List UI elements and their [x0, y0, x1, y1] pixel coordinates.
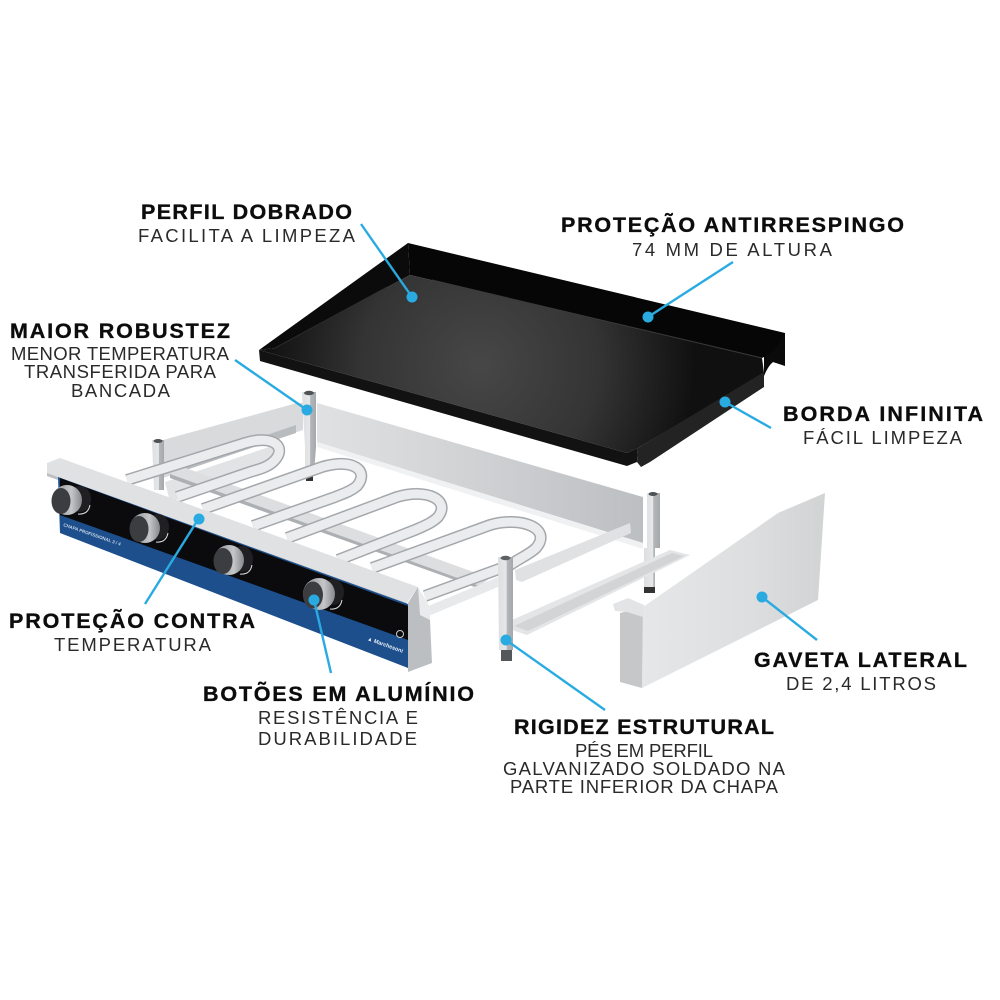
- line: robustez: [235, 360, 312, 416]
- label: rigidez estrutural: PARTE INFERIOR DA CHAPA: [510, 776, 779, 797]
- drawer end: [620, 607, 643, 688]
- label: rigidez estrutural: RIGIDEZ ESTRUTURAL: [514, 715, 774, 739]
- label: botões em alumínio: BOTÕES EM ALUMÍNIO: [203, 681, 474, 706]
- rear wall return: [764, 333, 785, 376]
- tray floor: [259, 275, 764, 453]
- label: borda infinita: BORDA INFINITA: [783, 402, 983, 426]
- label: rigidez estrutural: PÉS EM PERFIL: [575, 740, 713, 761]
- far left post: [152, 440, 164, 490]
- label: botões em alumínio: RESISTÊNCIA E: [258, 707, 418, 728]
- label: borda infinita: [783, 402, 983, 448]
- tray back wall: [408, 243, 785, 365]
- label: maior robustez: MAIOR ROBUSTEZ: [10, 319, 230, 343]
- griddle tray: [259, 243, 785, 467]
- brand logo: ▲ Marchesoni: [366, 636, 404, 655]
- drawer face: [642, 493, 825, 688]
- label: maior robustez: BANCADA: [71, 380, 171, 401]
- burner frame: [127, 391, 690, 661]
- callout lines: [145, 224, 817, 710]
- label: borda infinita: FÁCIL LIMPEZA: [803, 427, 963, 448]
- black panel: [60, 478, 408, 640]
- knob 2: [130, 513, 169, 543]
- power symbol: [396, 630, 404, 638]
- line: botões: [308, 594, 331, 673]
- label: proteção contra: PROTEÇÃO CONTRA: [9, 608, 255, 633]
- line: gaveta: [756, 592, 817, 640]
- tray left wall: [259, 243, 410, 350]
- label: proteção antirrespingo: [561, 212, 904, 260]
- infinite edge lip: [637, 372, 764, 467]
- label: proteção contra: [9, 608, 255, 655]
- label: maior robustez: MENOR TEMPERATURA: [11, 343, 230, 364]
- label: maior robustez: TRANSFERIDA PARA: [24, 361, 217, 382]
- label: botões em alumínio: DURABILIDADE: [258, 728, 417, 749]
- label: gaveta lateral: [754, 648, 967, 694]
- line: perfil dobrado: [361, 224, 418, 302]
- left side plate: [163, 403, 303, 478]
- rear plate: [317, 403, 643, 543]
- label: perfil dobrado: [138, 200, 356, 246]
- line: rigidez: [500, 634, 605, 710]
- side rail long: [512, 550, 690, 635]
- front control panel: [47, 458, 432, 672]
- blue band: [58, 477, 408, 668]
- knob 3: [214, 545, 253, 575]
- inner cross tube: [170, 466, 490, 586]
- label: gaveta lateral: GAVETA LATERAL: [754, 648, 967, 672]
- side rail short: [515, 523, 631, 582]
- top steel bar: [47, 458, 418, 603]
- label: proteção antirrespingo: PROTEÇÃO ANTIRRESPINGO: [561, 212, 904, 237]
- tray front edge: [259, 350, 638, 466]
- label: proteção antirrespingo: 74 MM DE ALTURA: [632, 239, 833, 260]
- drawer cap: [613, 598, 644, 617]
- line: antirrespingo: [642, 262, 733, 322]
- rear left post: [302, 392, 316, 473]
- label: rigidez estrutural: GALVANIZADO SOLDADO NA: [503, 758, 786, 779]
- burner tube loops: [127, 440, 541, 596]
- panel small text: CHAPA PROFISSIONAL 3 / 4: [63, 522, 122, 547]
- label: rigidez estrutural: [503, 715, 786, 797]
- right steel end: [408, 587, 432, 672]
- label: perfil dobrado: PERFIL DOBRADO: [141, 200, 352, 224]
- front right post: [498, 557, 513, 650]
- heat plate under first loop: [165, 446, 276, 502]
- label: perfil dobrado: FACILITA A LIMPEZA: [138, 225, 356, 246]
- knob 4: [303, 578, 344, 610]
- label: gaveta lateral: DE 2,4 LITROS: [786, 673, 936, 694]
- front connecting rail: [426, 577, 498, 617]
- line: proteção contra: [145, 514, 204, 604]
- label: maior robustez: [10, 319, 230, 401]
- side drawer: [613, 493, 825, 688]
- line: borda infinita: [720, 396, 771, 428]
- label: proteção contra: TEMPERATURA: [54, 634, 212, 655]
- knob 1: [52, 485, 91, 515]
- label: botões em alumínio: [203, 681, 474, 749]
- rear right post: [644, 493, 660, 587]
